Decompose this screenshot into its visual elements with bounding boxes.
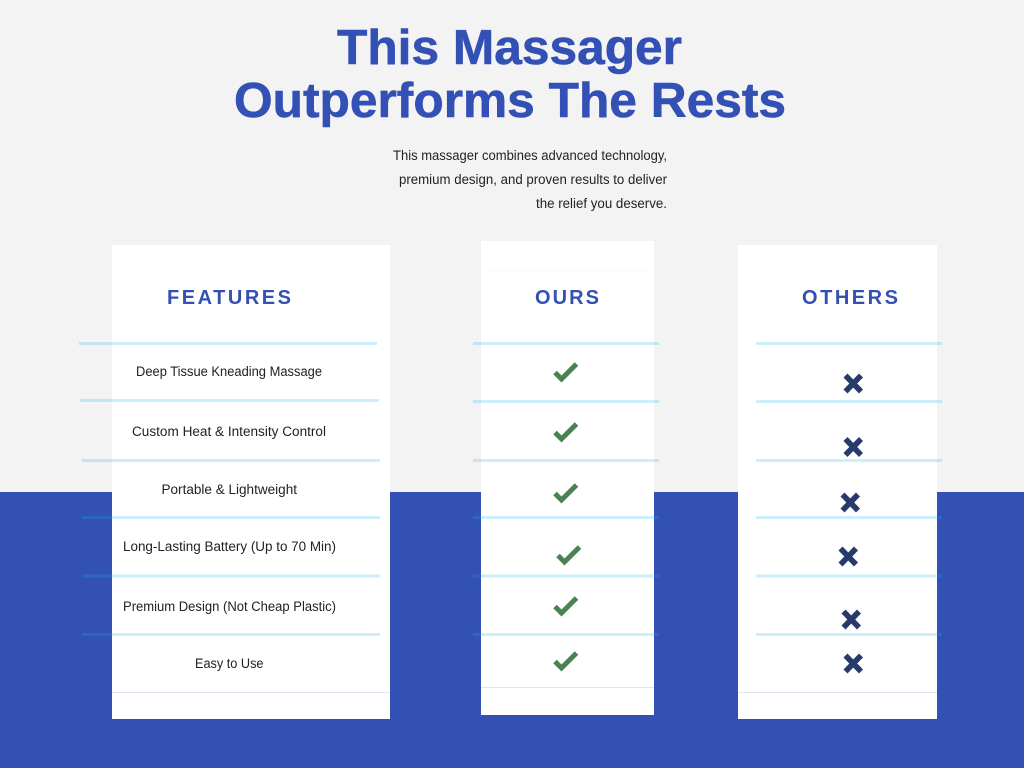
feature list: Premium Design (Not Cheap Plastic) <box>123 599 336 614</box>
title <box>234 21 786 128</box>
subtitle text block <box>393 148 667 211</box>
panel: ours <box>481 241 654 715</box>
subtitle text block: the relief you deserve. <box>536 196 667 211</box>
feature list: Long-Lasting Battery (Up to 70 Min) <box>123 539 336 554</box>
heading: features: FEATURES <box>167 287 291 309</box>
panel: others <box>738 245 937 719</box>
heading: ours: OURS <box>535 287 599 309</box>
feature list: Deep Tissue Kneading Massage <box>136 364 322 379</box>
feature list: Easy to Use <box>195 656 264 671</box>
cross icons <box>840 376 861 672</box>
blue background band <box>0 492 1024 768</box>
check icons <box>555 364 580 668</box>
row divider lines: others <box>756 344 942 634</box>
title: Outperforms The Rests <box>234 74 786 128</box>
feature list: Portable & Lightweight <box>162 482 297 497</box>
subtitle text block: This massager combines advanced technology, <box>393 148 667 163</box>
row divider lines: features <box>79 344 380 634</box>
feature list <box>123 364 336 671</box>
heading: others: OTHERS <box>802 287 898 309</box>
title: This Massager <box>337 21 682 75</box>
row divider lines: ours <box>473 344 659 634</box>
feature list: Custom Heat & Intensity Control <box>132 424 326 439</box>
panel: features <box>112 245 390 719</box>
subtitle text block: premium design, and proven results to deliver <box>399 172 667 187</box>
